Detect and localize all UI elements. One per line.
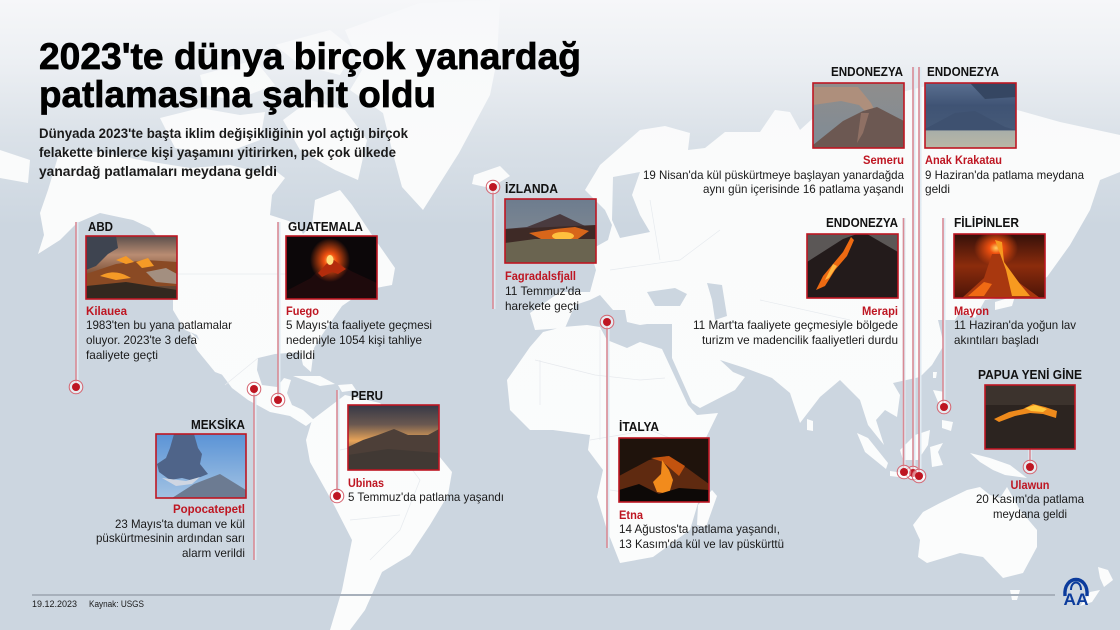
- description: [693, 318, 898, 347]
- photo: Popocatepetl: [156, 434, 246, 498]
- volcano name: Fagradalsfjall: [505, 269, 576, 283]
- description: 13 Kasım'da kül ve lav püskürttü: [619, 537, 784, 551]
- marker: Fuego: [271, 393, 285, 407]
- marker: Ubinas: [330, 489, 344, 503]
- photo: Fuego: [286, 236, 376, 298]
- country label: MEKSİKA: [191, 417, 245, 432]
- photo: Ubinas: [348, 406, 438, 470]
- volcano name: Ulawun: [1010, 478, 1050, 492]
- panel: İzlanda Fagradalsfjall: [486, 180, 596, 313]
- title: patlamasına şahit oldu: [39, 74, 436, 115]
- subtitle text block: felakette binlerce kişi yaşamını yitirirken, pek çok ülkede: [39, 145, 396, 160]
- volcano name: Popocatepetl: [173, 502, 245, 516]
- logo: AA: [1064, 580, 1088, 609]
- description: [925, 168, 1084, 196]
- description: [505, 284, 581, 313]
- description: 20 Kasım'da patlama: [976, 492, 1084, 506]
- marker: Etna: [600, 315, 614, 329]
- subtitle text block: Dünyada 2023'te başta iklim değişikliğinin yol açtığı birçok: [39, 126, 408, 141]
- description: aynı gün içerisinde 16 patlama yaşandı: [703, 182, 904, 196]
- country label: ENDONEZYA: [831, 65, 903, 79]
- photo: Semeru: [814, 84, 904, 148]
- photo: Fagradalsfjall: [506, 200, 596, 262]
- photo: Ulawun: [986, 386, 1074, 448]
- date and source: [32, 599, 144, 609]
- panel: Peru Ubinas: [330, 389, 504, 504]
- country label: ENDONEZYA: [927, 65, 999, 79]
- marker: Fagradalsfjall: [486, 180, 500, 194]
- description: 1983'ten bu yana patlamalar: [86, 318, 232, 332]
- description: [619, 522, 784, 551]
- country label: GUATEMALA: [288, 220, 363, 234]
- photo: Etna: [620, 438, 708, 502]
- country label: PAPUA YENİ GİNE: [978, 367, 1082, 382]
- title: 2023'te dünya birçok yanardağ: [39, 36, 581, 77]
- panel: Filipinler Mayon: [937, 215, 1076, 414]
- subtitle text block: yanardağ patlamaları meydana geldi: [39, 164, 277, 179]
- logo: AA: AA: [1064, 590, 1088, 609]
- title: [39, 36, 581, 115]
- description: 23 Mayıs'ta duman ve kül: [115, 517, 245, 531]
- panel: Endonezya Merapi: [693, 216, 911, 479]
- description: meydana geldi: [993, 507, 1067, 521]
- marker: Semeru: [906, 466, 920, 480]
- country borders: [173, 200, 850, 560]
- description: edildi: [286, 348, 315, 362]
- description: akıntıları başladı: [954, 333, 1039, 347]
- description: 19 Nisan'da kül püskürtmeye başlayan yanardağda: [643, 168, 904, 182]
- description: 11 Mart'ta faaliyete geçmesiyle bölgede: [693, 318, 898, 332]
- description: oluyor. 2023'te 3 defa: [86, 333, 197, 347]
- photo: Merapi: [808, 234, 898, 298]
- description: nedeniyle 1054 kişi tahliye: [286, 333, 422, 347]
- description: [976, 492, 1084, 521]
- date and source: Kaynak: USGS: [89, 599, 144, 609]
- marker: Mayon: [937, 400, 951, 414]
- description: turizm ve madencilik faaliyetleri durdu: [702, 333, 898, 347]
- description: 5 Mayıs'ta faaliyete geçmesi: [286, 318, 432, 332]
- description: 9 Haziran'da patlama meydana: [925, 168, 1084, 182]
- description: 11 Haziran'da yoğun lav: [954, 318, 1076, 332]
- description: alarm verildi: [182, 546, 245, 560]
- country label: PERU: [351, 389, 383, 403]
- panel: İtalya Etna: [600, 315, 784, 551]
- description: 5 Temmuz'da patlama yaşandı: [348, 490, 504, 504]
- footer rule: [32, 594, 1055, 596]
- description: geldi: [925, 182, 950, 196]
- description: [86, 318, 232, 362]
- volcano name: Ubinas: [348, 476, 384, 490]
- photo: Mayon: [954, 234, 1044, 298]
- description: [954, 318, 1076, 347]
- panel: Papua Yeni Gine Ulawun: [976, 367, 1084, 521]
- volcano name: Merapi: [862, 304, 898, 318]
- country label: ENDONEZYA: [826, 216, 898, 230]
- photo: Kilauea: [86, 236, 176, 298]
- volcano name: Fuego: [286, 304, 319, 318]
- marker: Ulawun: [1023, 460, 1037, 474]
- panel: ABD Kilauea: [69, 220, 232, 394]
- volcano name: Semeru: [863, 153, 904, 167]
- country label: İTALYA: [619, 419, 659, 434]
- volcano name: Etna: [619, 508, 643, 522]
- panel: Meksika Popocatepetl: [96, 382, 261, 560]
- panel: Endonezya Anak Krakatau: [912, 65, 1084, 483]
- description: faaliyete geçti: [86, 348, 158, 362]
- marker: Popocatepetl: [247, 382, 261, 396]
- description: [286, 318, 432, 362]
- marker: Anak Krakatau: [912, 469, 926, 483]
- marker: Merapi: [897, 465, 911, 479]
- date and source: 19.12.2023: [32, 599, 77, 609]
- subtitle text block: [39, 126, 408, 179]
- description: [643, 168, 904, 196]
- volcano name: Mayon: [954, 304, 989, 318]
- volcano name: Kilauea: [86, 304, 127, 318]
- country label: ABD: [88, 220, 113, 234]
- description: [96, 517, 245, 560]
- marker: Kilauea: [69, 380, 83, 394]
- description: 14 Ağustos'ta patlama yaşandı,: [619, 522, 780, 536]
- description: harekete geçti: [505, 299, 579, 313]
- country label: FİLİPİNLER: [954, 215, 1019, 230]
- panel: Endonezya Semeru: [643, 65, 920, 480]
- panel: Guatemala Fuego: [271, 220, 432, 407]
- country label: İZLANDA: [505, 181, 558, 196]
- photo: Anak Krakatau: [926, 84, 1016, 148]
- description: püskürtmesinin ardından sarı: [96, 531, 245, 545]
- volcano name: Anak Krakatau: [925, 153, 1002, 167]
- inland seas: [612, 172, 727, 320]
- description: 11 Temmuz'da: [505, 284, 581, 298]
